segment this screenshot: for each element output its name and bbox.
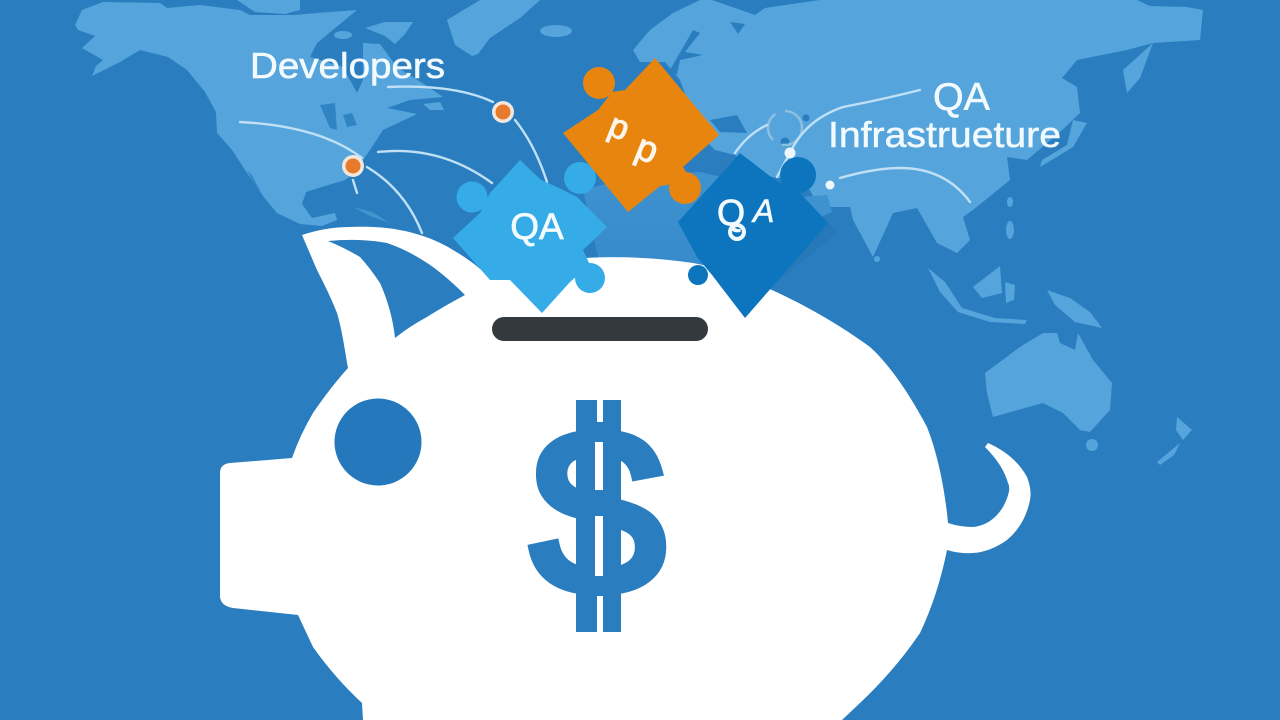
connection lines bbox=[240, 87, 970, 233]
map node: Asia bbox=[826, 180, 834, 190]
pig eye bbox=[334, 398, 422, 486]
label: QA Infrastructure: Infrastrueture bbox=[828, 114, 1061, 155]
map: Australia bbox=[985, 333, 1112, 432]
map: Sri Lanka bbox=[874, 256, 880, 262]
puzzle piece: dark blue QA: A bbox=[751, 193, 774, 229]
map: Borneo bbox=[973, 266, 1002, 298]
map node: Americas bbox=[342, 155, 364, 177]
coin slot bbox=[492, 317, 708, 341]
map: Baffin Island bbox=[365, 22, 413, 44]
map: Taiwan bbox=[1007, 197, 1013, 207]
map: Tasmania bbox=[1086, 439, 1098, 451]
map: seas bbox=[247, 0, 820, 200]
pig ear opening bbox=[328, 240, 465, 338]
label: Developers: Developers bbox=[250, 45, 445, 86]
world map bbox=[75, 0, 1203, 465]
map: Japan bbox=[1040, 120, 1087, 167]
puzzle piece: orange: p bbox=[603, 106, 635, 148]
label: QA Infrastructure: QA bbox=[933, 76, 990, 119]
piggy bank bbox=[220, 227, 1031, 720]
puzzle piece: orange bbox=[563, 58, 719, 212]
puzzle piece: light blue QA: QA bbox=[510, 206, 564, 247]
map: Arabia bbox=[800, 195, 832, 220]
map: Greenland bbox=[447, 0, 540, 56]
map: Caspian ring bbox=[768, 111, 802, 145]
map: Philippines bbox=[1006, 221, 1014, 239]
dollar sign: $ bbox=[532, 382, 664, 641]
map: Newfoundland bbox=[423, 102, 444, 110]
map: Sulawesi bbox=[1005, 282, 1015, 303]
map: Eurasia bbox=[633, 0, 1203, 257]
map: Hudson island bbox=[334, 31, 352, 39]
map: Arctic islands bbox=[237, 0, 300, 14]
map: New Zealand bbox=[1157, 417, 1192, 465]
label: QA Infrastructure bbox=[828, 76, 1061, 155]
map node: Atlantic bbox=[492, 101, 514, 123]
map node: Europe bbox=[784, 148, 796, 158]
map: Sakhalin bbox=[1123, 43, 1153, 93]
puzzle piece: dark blue QA bbox=[678, 153, 838, 318]
puzzle piece: orange: p bbox=[630, 126, 665, 172]
map: Iceland bbox=[540, 25, 572, 37]
pig body bbox=[220, 227, 1031, 720]
puzzle piece: light blue QA bbox=[453, 160, 607, 313]
map: Africa bbox=[583, 172, 760, 275]
map: North America bbox=[75, 2, 443, 226]
puzzle piece: dark blue QA: Q bbox=[717, 192, 745, 233]
map: New Guinea bbox=[1047, 290, 1102, 328]
map: Cuba bbox=[353, 207, 390, 223]
map: Sumatra and Java bbox=[928, 268, 1027, 324]
